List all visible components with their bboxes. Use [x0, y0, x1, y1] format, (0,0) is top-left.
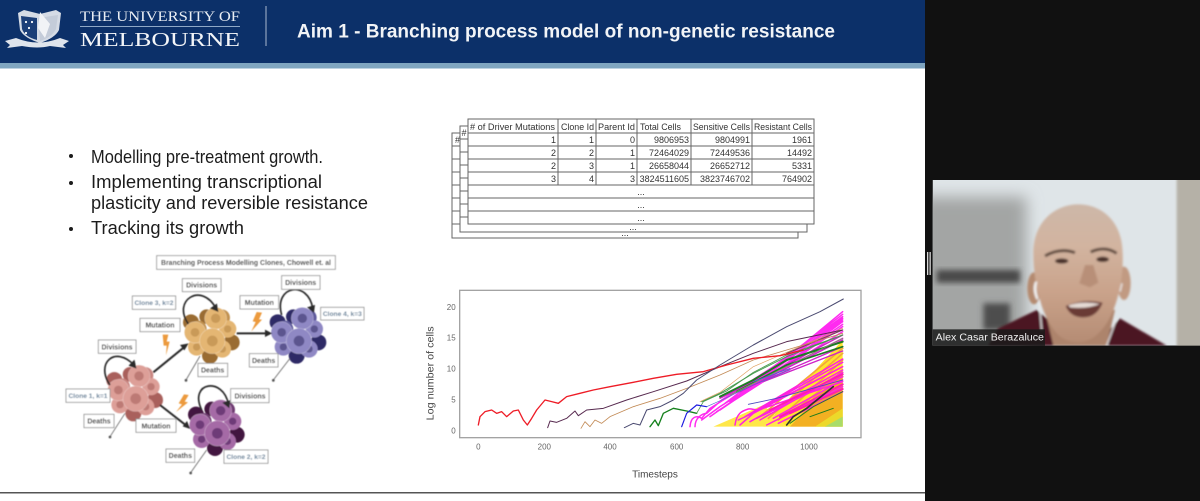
front table grid: 1961: [792, 135, 812, 145]
name tag: Alex Casar Berazaluce: [936, 333, 1044, 344]
bullet list: [69, 146, 368, 238]
slide background: [0, 0, 925, 501]
front table grid: 1: [551, 135, 556, 145]
division loop arrows: [105, 290, 314, 410]
axis tick labels: 600: [670, 442, 684, 451]
axis tick labels: 800: [736, 442, 750, 451]
clone 2 cell cluster: [188, 400, 245, 456]
clone 3 cell cluster: [183, 307, 240, 364]
diagram title box: Branching Process Modelling Clones, Chowell et. al: [161, 260, 331, 267]
logo wordmark: THE UNIVERSITY OF: [80, 9, 240, 25]
label boxes: Mutation: [145, 323, 175, 330]
front table grid: ...: [637, 187, 645, 197]
bullet list: plasticity and reversible resistance: [91, 192, 368, 213]
webcam video: speaker: [932, 180, 1200, 346]
diagram: branching process clones: [66, 256, 364, 474]
front table grid: Resistant Cells: [754, 122, 812, 132]
label boxes: [84, 276, 320, 462]
front table grid: ...: [637, 200, 645, 210]
front table grid: 3: [589, 161, 594, 171]
bullet list: Modelling pre-treatment growth.: [91, 146, 323, 167]
front table grid: 3823746702: [700, 174, 750, 184]
front table grid: 26652712: [710, 161, 750, 171]
data table stack: [452, 119, 814, 238]
front table grid: 3: [551, 174, 556, 184]
bullet list: Implementing transcriptional: [91, 171, 322, 192]
diagram title box: [157, 256, 335, 269]
label boxes: Deaths: [252, 358, 275, 365]
front table grid: 0: [630, 135, 635, 145]
label boxes: Mutation: [245, 300, 274, 307]
front table grid: 9804991: [715, 135, 750, 145]
clone labels: Clone 2, k=2: [226, 454, 266, 461]
label boxes: Divisions: [101, 344, 133, 351]
clone 4 cell cluster: [270, 307, 326, 364]
front table grid: Parent Id: [598, 122, 635, 132]
front table grid: Sensitive Cells: [693, 122, 750, 132]
axis tick labels: [447, 303, 818, 451]
mutation arrows: [153, 330, 272, 429]
blurred room background: [932, 180, 1200, 346]
label boxes: Deaths: [169, 453, 192, 460]
front table grid: # of Driver Mutations: [470, 122, 556, 132]
footer rule: [0, 492, 925, 494]
axis tick labels: 5: [451, 396, 456, 405]
front table grid: 3: [630, 174, 635, 184]
front table grid: 2: [589, 148, 594, 158]
front table grid: 2: [551, 161, 556, 171]
middle table sheet: [460, 126, 807, 232]
video panel background: [925, 0, 1200, 501]
front table grid: [468, 119, 814, 224]
front table grid: 72464029: [649, 148, 689, 158]
header banner: [0, 0, 925, 68]
front table grid: 2: [551, 148, 556, 158]
line chart: log number of cells vs timesteps: [426, 290, 861, 480]
logo wordmark: MELBOURNE: [80, 29, 240, 51]
data lines: [478, 299, 843, 428]
axis tick labels: 1000: [800, 442, 818, 451]
clone labels: [66, 296, 364, 463]
front table grid: 764902: [782, 174, 812, 184]
back table sheet: [452, 133, 798, 238]
label boxes: Deaths: [87, 418, 111, 425]
clone labels: Clone 1, k=1: [68, 393, 108, 400]
axis tick labels: 20: [447, 303, 456, 312]
front table grid: 1: [630, 161, 635, 171]
label boxes: Divisions: [285, 280, 316, 287]
front table grid: ...: [637, 213, 645, 223]
front table grid: Total Cells: [640, 122, 681, 132]
death arrows: [109, 356, 290, 474]
chart frame: [460, 290, 861, 438]
front table grid: 26658044: [649, 161, 689, 171]
axis tick labels: 200: [538, 442, 552, 451]
axis tick labels: 15: [447, 334, 456, 343]
label boxes: Mutation: [141, 423, 171, 430]
logo wordmark: [80, 9, 240, 51]
front table grid: 72449536: [710, 148, 750, 158]
panel divider handle: [927, 252, 931, 275]
front table grid: 9806953: [654, 135, 689, 145]
title: Aim 1 - Branching process model of non-genetic resistance: [297, 22, 835, 42]
middle table sheet: #: [462, 128, 467, 138]
x axis label: Timesteps: [632, 469, 678, 480]
axis tick labels: 0: [476, 442, 481, 451]
axis tick labels: 400: [603, 442, 617, 451]
name tag: [933, 329, 1045, 346]
icons: lightning bolts: [163, 312, 262, 412]
clone labels: Clone 3, k=2: [134, 300, 174, 307]
front table grid: 1: [630, 148, 635, 158]
icon: university crest: [5, 10, 69, 48]
front table grid: 5331: [792, 161, 812, 171]
y axis label: Log number of cells: [426, 326, 437, 420]
front table grid: 3824511605: [640, 174, 689, 184]
clone 1 cell cluster: [106, 365, 163, 421]
back table sheet: ...: [621, 228, 629, 238]
middle table sheet: ...: [629, 222, 637, 232]
label boxes: Divisions: [186, 283, 217, 290]
bullet list: Tracking its growth: [91, 217, 244, 238]
front table grid: 14492: [787, 148, 812, 158]
axis tick labels: 10: [447, 365, 456, 374]
axis tick labels: 0: [451, 426, 456, 435]
speaker figure: [988, 204, 1167, 346]
label boxes: Deaths: [201, 368, 224, 375]
label boxes: Divisions: [234, 393, 266, 400]
front table grid: 4: [589, 174, 594, 184]
back table sheet: #: [455, 135, 460, 145]
clone labels: Clone 4, k=3: [323, 311, 362, 318]
front table grid: Clone Id: [561, 122, 594, 132]
front table grid: 1: [589, 135, 594, 145]
